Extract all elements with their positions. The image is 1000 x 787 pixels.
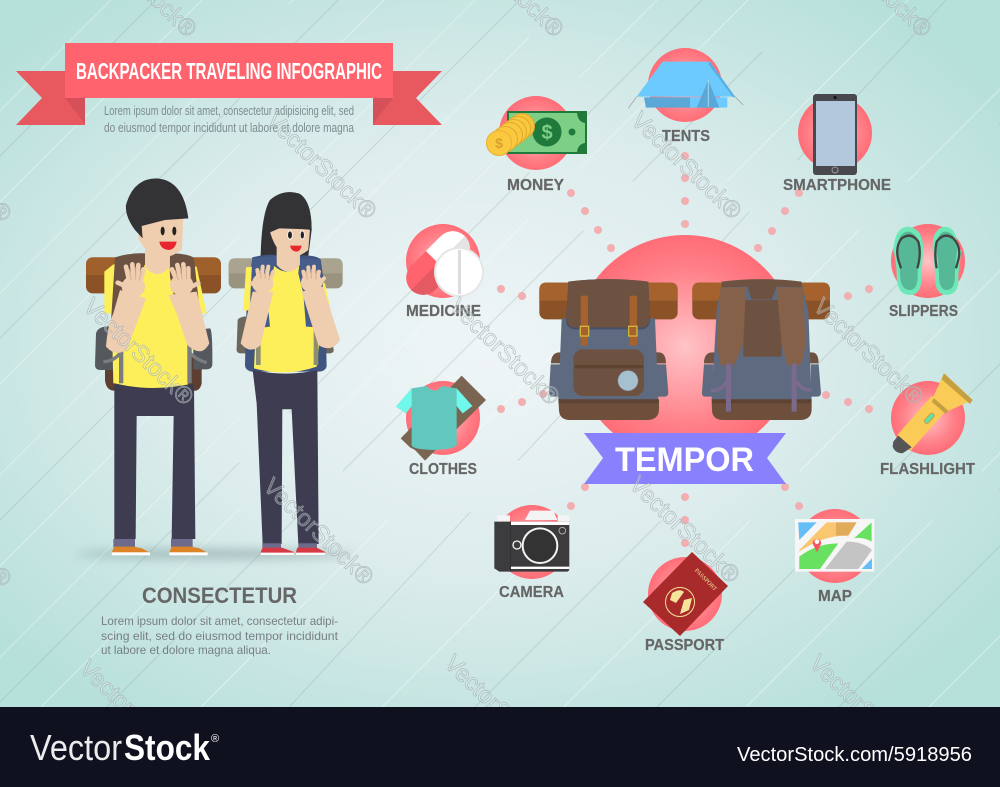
intro text: Lorem ipsum dolor sit amet, consectetur adipisicing elit, sed [104, 103, 354, 118]
center ribbon label: TEMPOR [615, 441, 754, 479]
watermarks: VectorStock® [804, 650, 925, 768]
item: slippers [891, 224, 965, 298]
caption text: Lorem ipsum dolor sit amet, consectetur adipi- [101, 614, 338, 628]
item: flashlight [891, 373, 973, 455]
item: money: $ [541, 122, 553, 144]
item: clothes [396, 376, 486, 461]
footer logo: Stock [124, 727, 211, 768]
connector dots [497, 152, 873, 547]
intro text [104, 103, 355, 135]
watermarks: VectorStock® [439, 650, 560, 768]
item: money: $ [495, 135, 503, 151]
intro text: do eiusmod tempor incididunt ut labore et dolore magna [104, 120, 355, 135]
label: map: MAP [818, 588, 852, 605]
watermarks: VectorStock® [261, 107, 382, 225]
footer logo: ® [211, 733, 219, 745]
label: tents: TENTS [662, 128, 710, 145]
label: clothes: CLOTHES [409, 461, 477, 478]
watermarks: VectorStock® [74, 655, 195, 773]
caption text: scing elit, sed do eiusmod tempor incididunt [101, 629, 339, 643]
center ribbon [584, 433, 786, 484]
item: medicine [399, 224, 484, 302]
footer logo [30, 727, 219, 768]
item: tents [628, 48, 743, 122]
label: smartphone: SMARTPHONE [783, 177, 891, 194]
label: slippers: SLIPPERS [889, 303, 958, 320]
watermarks: VectorStock® [624, 471, 745, 589]
label: flashlight: FLASHLIGHT [880, 461, 975, 478]
footer logo: Vector [30, 727, 122, 768]
item: map [795, 509, 874, 583]
caption heading: CONSECTETUR [142, 583, 297, 608]
watermarks: VectorStock® [78, 293, 199, 411]
footer bar [0, 707, 1000, 787]
item: camera [494, 505, 569, 579]
label: camera: CAMERA [499, 584, 564, 601]
footer url: VectorStock.com/5918956 [737, 744, 972, 766]
central circle [573, 235, 797, 459]
ground shadow [75, 549, 355, 559]
item: smartphone [798, 94, 872, 175]
man traveler [86, 178, 221, 555]
item: passport: PASSPORT [693, 568, 718, 593]
caption text: ut labore et dolore magna aliqua. [101, 643, 271, 657]
label: medicine: MEDICINE [406, 303, 481, 320]
watermarks: VectorStock® [626, 107, 747, 225]
woman traveler [229, 192, 343, 555]
title: BACKPACKER TRAVELING INFOGRAPHIC [76, 58, 382, 84]
item: passport [643, 552, 728, 636]
item: money [486, 96, 586, 170]
watermarks: VectorStock® [258, 473, 379, 591]
watermarks: VectorStock® [444, 293, 565, 411]
backpack back [692, 279, 830, 420]
caption text [101, 614, 339, 657]
backpack front [539, 279, 678, 420]
watermarks: VectorStock® [808, 293, 929, 411]
label: money: MONEY [507, 177, 564, 194]
banner ribbon [16, 43, 442, 125]
label: passport: PASSPORT [645, 637, 724, 654]
